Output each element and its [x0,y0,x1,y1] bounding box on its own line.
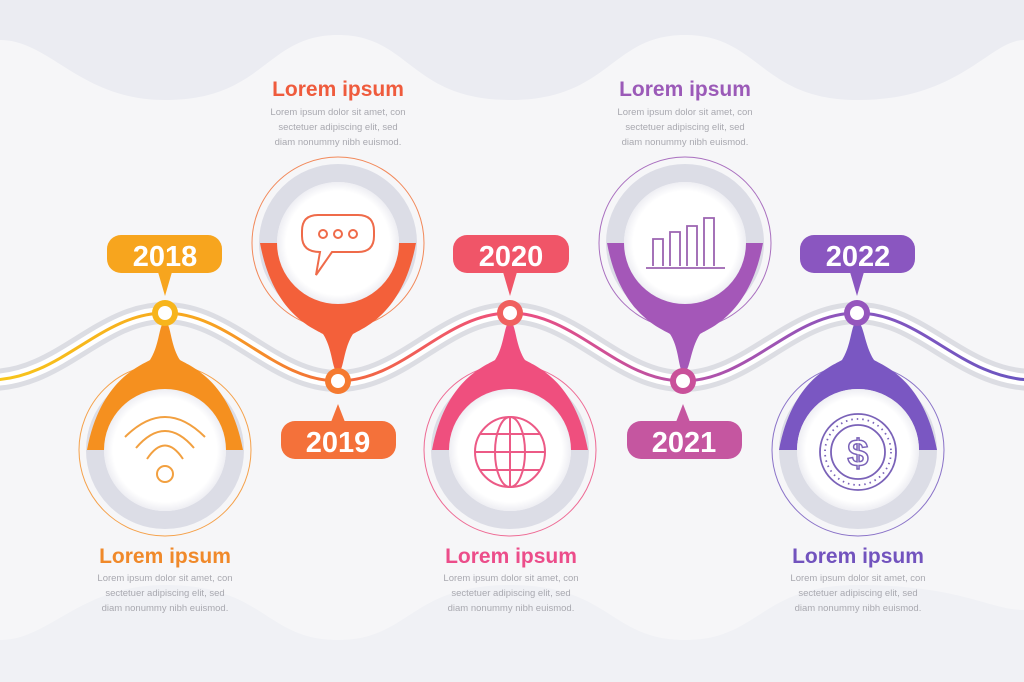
text 2018: Lorem ipsum [99,545,231,568]
text 2019: diam nonummy nibh euismod. [275,137,401,148]
text 2021: diam nonummy nibh euismod. [622,137,748,148]
text 2022: Lorem ipsum dolor sit amet, con [790,573,926,584]
icon: chat [302,215,374,275]
timeline wave [0,313,1024,381]
year 2018 [107,235,222,296]
icon: coin [820,414,896,490]
text 2019: Lorem ipsum [272,78,404,101]
text 2022: sectetuer adipiscing elit, sed [798,588,918,599]
year 2021 [627,404,742,459]
year 2022 [800,235,915,296]
step 2018 [79,235,251,614]
year 2020: 2020 [479,241,543,273]
background top waves [0,0,1024,100]
text 2021: Lorem ipsum dolor sit amet, con [617,107,753,118]
text 2019: Lorem ipsum dolor sit amet, con [270,107,406,118]
text 2018 [97,545,233,614]
text 2020: Lorem ipsum dolor sit amet, con [443,573,579,584]
icon: wifi [125,417,205,482]
text 2022 [790,545,926,614]
text 2019 [270,78,406,148]
step 2022 [772,235,944,614]
year 2022: 2022 [826,241,890,273]
text 2022: diam nonummy nibh euismod. [795,603,921,614]
text 2021 [617,78,753,148]
text 2020: Lorem ipsum [445,545,577,568]
text 2020: sectetuer adipiscing elit, sed [451,588,571,599]
icon: coin: $ [847,433,869,475]
year 2021: 2021 [652,427,716,459]
icon: bar chart [646,218,725,268]
year 2019: 2019 [306,427,370,459]
text 2020: diam nonummy nibh euismod. [448,603,574,614]
text 2018: sectetuer adipiscing elit, sed [105,588,225,599]
step 2020 [424,235,596,614]
year 2018: 2018 [133,241,197,273]
text 2018: diam nonummy nibh euismod. [102,603,228,614]
text 2020 [443,545,579,614]
icon: globe [475,417,545,487]
text 2022: Lorem ipsum [792,545,924,568]
text 2018: Lorem ipsum dolor sit amet, con [97,573,233,584]
step 2019 [252,78,424,459]
year 2020 [453,235,569,296]
step 2021 [599,78,771,459]
background bottom waves [0,585,1024,682]
text 2019: sectetuer adipiscing elit, sed [278,122,398,133]
text 2021: Lorem ipsum [619,78,751,101]
year 2019 [281,404,396,459]
text 2021: sectetuer adipiscing elit, sed [625,122,745,133]
